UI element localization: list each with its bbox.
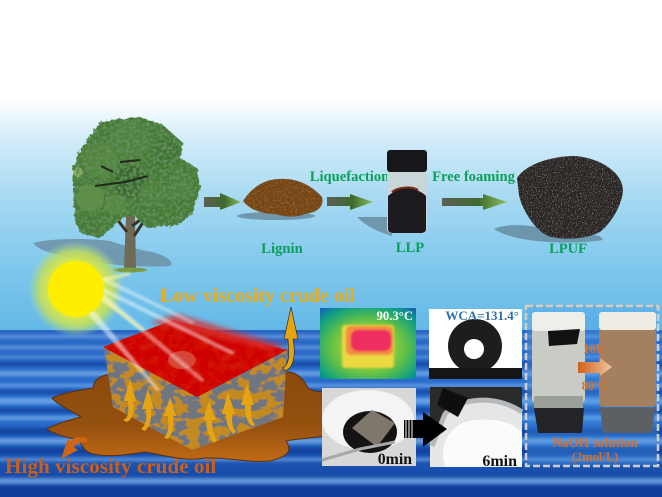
lignin pile shadow bbox=[237, 212, 315, 220]
block heated top bbox=[103, 320, 287, 397]
heat arrow 4 bbox=[203, 401, 217, 443]
arrow: 0 min to 6 min bbox=[404, 412, 447, 447]
droplet bbox=[448, 319, 502, 373]
panel: 0 min photo bbox=[322, 388, 416, 468]
sky background bbox=[0, 0, 662, 332]
grass bbox=[113, 268, 147, 272]
arrow: vial to foam bbox=[442, 194, 507, 210]
thermal halo bbox=[346, 326, 393, 355]
tree branches bbox=[95, 160, 148, 186]
low viscosity arrow bbox=[283, 307, 298, 371]
0min label: 0min bbox=[378, 451, 412, 468]
arrow: tree to lignin bbox=[204, 193, 241, 210]
label: Liquefaction: Liquefaction bbox=[310, 169, 389, 185]
arrow: lignin to vial bbox=[327, 194, 373, 210]
vial liquid bbox=[388, 188, 426, 233]
concentration label: (2mol/L) bbox=[572, 450, 618, 464]
foam on tweezers bbox=[437, 388, 468, 417]
temperature label: 90.3°C bbox=[377, 309, 413, 323]
label: low viscosity crude oil: Low viscosity crude oil bbox=[160, 285, 355, 307]
hot spot bbox=[351, 330, 391, 351]
panel: NaOH test bbox=[526, 306, 658, 466]
heat arrow 3 bbox=[164, 397, 176, 439]
thermal block bbox=[342, 325, 394, 368]
foam block bbox=[103, 314, 287, 450]
crude oil puddle bbox=[47, 372, 325, 461]
WCA label: WCA=131.4° bbox=[445, 308, 519, 323]
sunlight rays bbox=[86, 272, 235, 391]
upward heat arrows bbox=[123, 379, 255, 443]
label: Free foaming: Free foaming bbox=[432, 169, 516, 185]
sun glow bbox=[28, 241, 124, 337]
foam cube bbox=[352, 410, 395, 447]
tree shadow bbox=[33, 239, 171, 267]
water with stripes bbox=[0, 330, 662, 497]
panel: water contact angle bbox=[429, 308, 522, 379]
label: LPUF: LPUF bbox=[549, 241, 587, 257]
icon: LLP vial bbox=[387, 150, 427, 233]
oil stain bbox=[343, 411, 397, 453]
dark background bbox=[430, 387, 522, 440]
lignin pile bbox=[243, 179, 322, 217]
vial cap bbox=[387, 150, 427, 172]
icon: LPUF foam bbox=[517, 156, 623, 239]
tree trunk bbox=[124, 215, 136, 268]
bottle left bbox=[532, 312, 585, 433]
label: high viscosity crude oil: High viscosity crude oil bbox=[5, 454, 216, 478]
dashed frame bbox=[526, 306, 658, 466]
foam shadow bbox=[494, 225, 603, 242]
temperature: 80°C bbox=[582, 379, 608, 393]
orange arrow bbox=[578, 358, 612, 376]
time label: 10h bbox=[583, 341, 604, 356]
white dish bbox=[443, 420, 522, 467]
vial shadow bbox=[357, 217, 392, 236]
substrate bbox=[429, 368, 522, 379]
6min label: 6min bbox=[482, 453, 517, 470]
heat arrow 1 bbox=[123, 379, 136, 422]
panel: 6 min photo bbox=[430, 387, 522, 470]
heat arrow 2 bbox=[141, 389, 154, 431]
icon: sun bbox=[48, 261, 104, 317]
icon: tree bbox=[73, 117, 200, 272]
panel tint bbox=[526, 306, 658, 466]
black foam in solution bbox=[548, 329, 580, 346]
label: LLP: LLP bbox=[396, 240, 424, 256]
label: Lignin: Lignin bbox=[261, 241, 303, 257]
block side bbox=[104, 347, 287, 450]
high viscosity arrow bbox=[61, 437, 87, 459]
heat arrow 5 bbox=[222, 392, 236, 434]
tree crown bbox=[73, 117, 200, 238]
panel: thermal image bbox=[320, 308, 416, 379]
NaOH label: NaOH solution bbox=[552, 435, 638, 450]
heat arrow 6 bbox=[241, 384, 255, 426]
vial glass bbox=[387, 171, 427, 233]
bottle right bbox=[599, 312, 656, 433]
